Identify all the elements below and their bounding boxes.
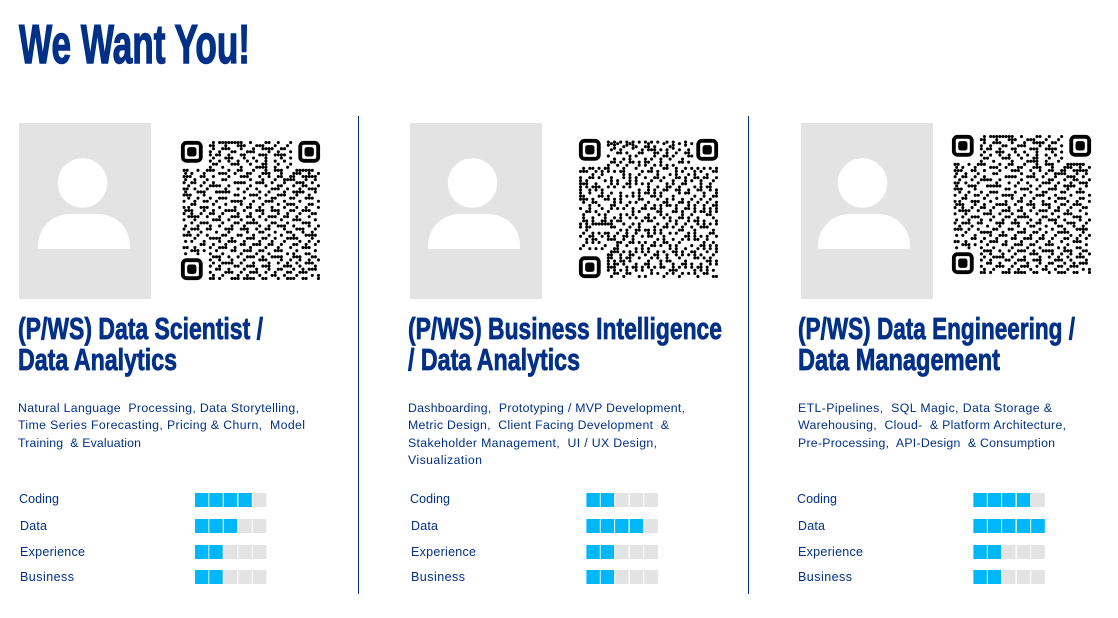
skill ratings: Experience: [798, 545, 863, 559]
role description: Warehousing, Cloud- & Platform Architecture,: [798, 418, 1066, 432]
role description: Training & Evaluation: [18, 436, 141, 450]
title: We Want You!: [19, 13, 250, 75]
QR code: [183, 143, 319, 278]
role heading: [18, 311, 263, 377]
role description: Visualization: [408, 453, 482, 467]
portrait placeholder: [801, 123, 933, 299]
role description: ETL-Pipelines, SQL Magic, Data Storage &: [798, 401, 1053, 415]
panel: business intelligence: [408, 123, 722, 584]
skill ratings: Coding: [410, 492, 450, 506]
role description: [408, 401, 685, 467]
role description: Metric Design, Client Facing Development &: [408, 418, 670, 432]
role description: [18, 401, 305, 450]
QR code: [954, 137, 1090, 272]
role heading: [408, 311, 722, 377]
skill ratings: Business: [798, 570, 852, 584]
role heading: [798, 311, 1075, 377]
skill ratings: [410, 492, 658, 584]
role heading: Data Analytics: [18, 342, 177, 377]
divider right: [748, 116, 749, 594]
role heading: (P/WS) Data Scientist /: [18, 311, 263, 346]
role description: [798, 401, 1066, 450]
skill ratings: Business: [411, 570, 465, 584]
skill ratings: Coding: [797, 492, 837, 506]
skill ratings: [797, 492, 1045, 584]
portrait placeholder: [19, 123, 151, 299]
role heading: (P/WS) Business Intelligence: [408, 311, 722, 346]
skill ratings: Coding: [19, 492, 59, 506]
role description: Time Series Forecasting, Pricing & Churn, Model: [18, 418, 305, 432]
portrait placeholder: [410, 123, 542, 299]
role description: Natural Language Processing, Data Storytelling,: [18, 401, 299, 415]
role heading: Data Management: [798, 342, 1000, 377]
skill ratings: Data: [20, 519, 47, 533]
skill ratings: Business: [20, 570, 74, 584]
panel: data scientist: [18, 123, 319, 584]
QR code: [581, 141, 716, 277]
role description: Pre-Processing, API-Design & Consumption: [798, 436, 1055, 450]
panel: data engineering: [797, 123, 1090, 584]
skill ratings: [19, 492, 266, 584]
role description: Dashboarding, Prototyping / MVP Development,: [408, 401, 685, 415]
divider left: [358, 116, 359, 594]
role description: Stakeholder Management, UI / UX Design,: [408, 436, 657, 450]
role heading: / Data Analytics: [408, 342, 580, 377]
skill ratings: Data: [798, 519, 825, 533]
skill ratings: Data: [411, 519, 438, 533]
skill ratings: Experience: [20, 545, 85, 559]
skill ratings: Experience: [411, 545, 476, 559]
